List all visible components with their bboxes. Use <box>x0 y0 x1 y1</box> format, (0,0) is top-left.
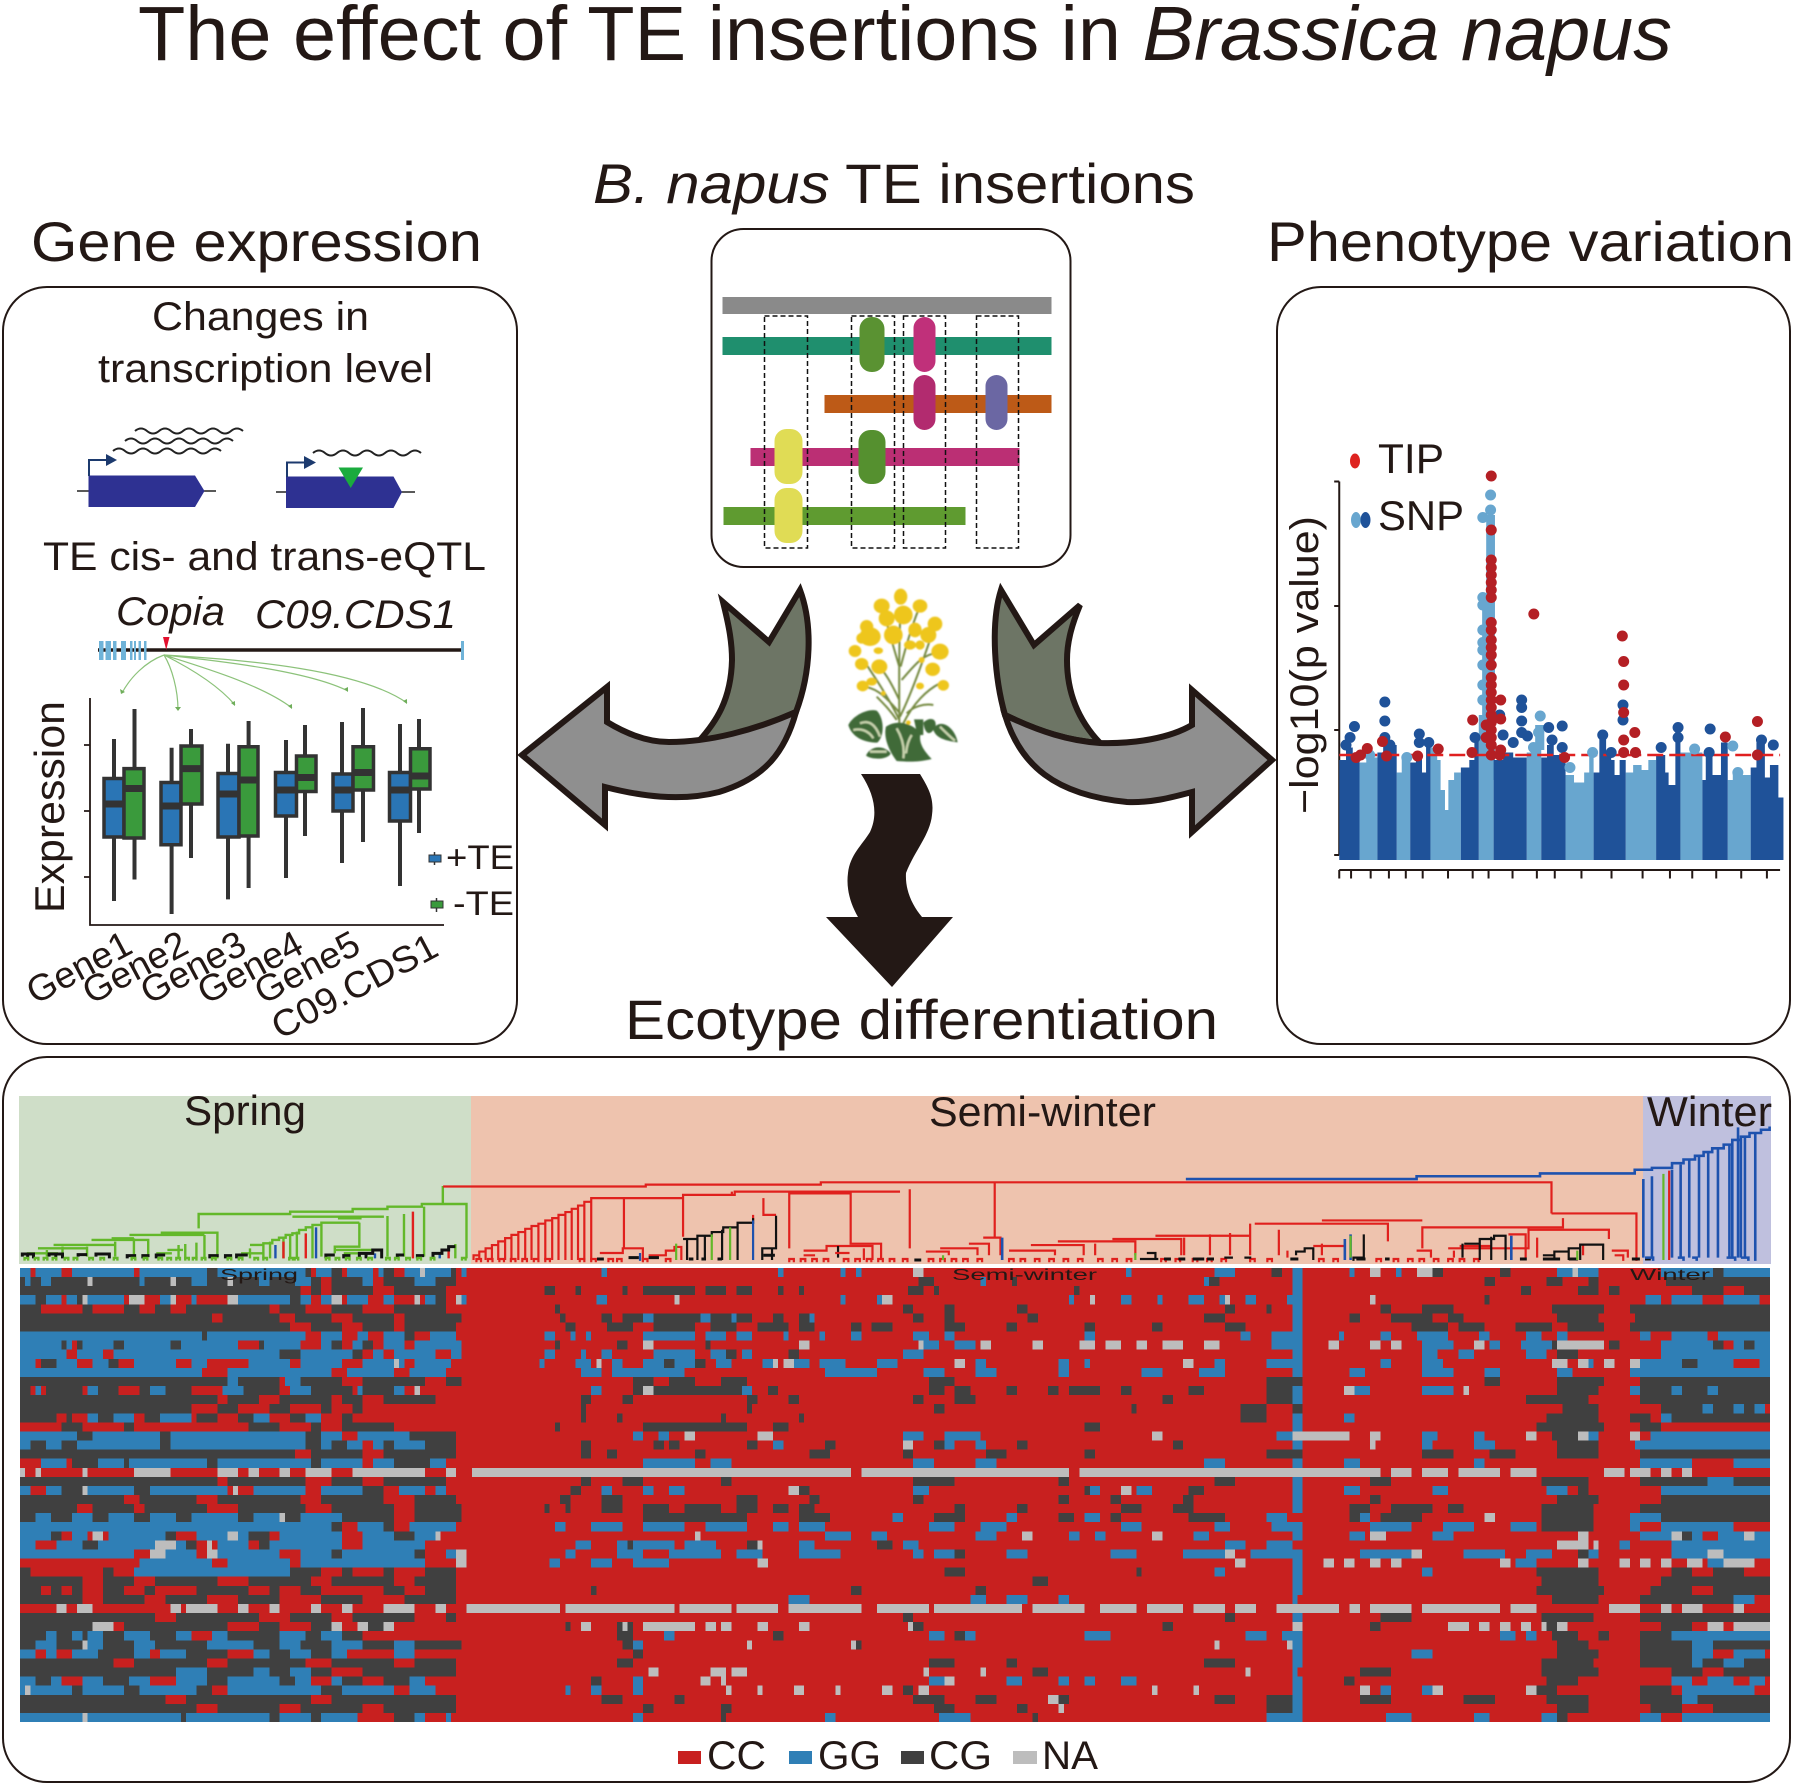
icon: gene with TE insertion, one transcript <box>276 450 421 508</box>
icon: rapeseed plant <box>848 589 958 762</box>
ecotype band: spring <box>19 1096 471 1264</box>
phylogenetic tree <box>22 1126 1770 1262</box>
leaves <box>848 710 958 762</box>
boxplot axes <box>84 698 444 925</box>
legend: +TE: +TE <box>446 839 514 877</box>
label: Spring: Spring <box>184 1087 306 1134</box>
tree: spring clade <box>22 1186 466 1261</box>
axes <box>1334 482 1780 878</box>
ecotype band: winter <box>1643 1096 1771 1264</box>
legend item: GG <box>789 1734 881 1778</box>
gene model with TE marker and links <box>98 637 464 711</box>
legend: TIP: TIP <box>1378 435 1444 482</box>
threshold line <box>1339 754 1780 756</box>
x-axis gene labels: C09.CDS1 <box>265 925 444 1047</box>
ecotype band: semi-winter <box>471 1096 1643 1264</box>
icon: gene without TE, three transcripts <box>77 428 243 507</box>
heading: Gene expression: Gene expression <box>31 210 482 273</box>
stems <box>862 610 940 727</box>
panel: gene expression <box>3 287 517 1047</box>
text: TE cis- and trans-eQTL: TE cis- and trans-eQTL <box>43 535 486 579</box>
light SNP points <box>1370 495 1738 772</box>
text: Copia: Copia <box>116 590 225 634</box>
panel: phenotype variation <box>1277 287 1790 1044</box>
legend item: CG: CG <box>929 1734 992 1778</box>
text: changes in transcription level: Changes in <box>152 295 369 339</box>
heatmap: CG cells <box>20 1273 1770 1717</box>
legend: genotype <box>678 1734 1098 1778</box>
legend: -TE: -TE <box>453 885 514 923</box>
legend item: CG <box>901 1734 992 1778</box>
legend: SNP: SNP <box>1378 492 1464 539</box>
text: changes in transcription level: transcription level <box>98 347 433 391</box>
label: Winter: Winter <box>1647 1088 1772 1135</box>
x-axis gene labels <box>20 923 444 1047</box>
panel: B. napus TE insertions <box>712 229 1070 567</box>
TIP points <box>1356 476 1757 758</box>
dashed TE loci boxes <box>764 316 1018 548</box>
dark chromosomes <box>1339 725 1783 860</box>
light chromosomes <box>1360 515 1751 860</box>
label: Semi-winter: Semi-winter <box>929 1088 1156 1135</box>
TE insertion pills <box>774 317 1008 543</box>
heading: Phenotype variation: Phenotype variation <box>1267 210 1794 273</box>
heatmap sub-labels: Winter <box>1630 1267 1711 1284</box>
y-axis label: −log10(p value) <box>1283 516 1327 814</box>
legend: TIP <box>1350 435 1444 482</box>
haplotype tracks <box>722 297 1052 525</box>
heading: Ecotype differentiation: Ecotype differentiation <box>625 988 1218 1051</box>
heatmap: NA cells <box>20 1273 1770 1717</box>
text: C09.CDS1: C09.CDS1 <box>255 593 456 637</box>
arrow: to phenotype variation <box>995 590 1272 832</box>
flowers <box>849 589 949 725</box>
legend: -TE <box>431 885 514 923</box>
legend item: NA <box>1013 1734 1098 1778</box>
heatmap <box>20 1267 1770 1722</box>
legend item: NA: NA <box>1042 1734 1098 1778</box>
text: Expression axis label: Expression <box>26 701 73 913</box>
heatmap: GG cells <box>20 1273 1770 1717</box>
tree: semi-winter right and winter <box>900 1126 1770 1262</box>
x-axis gene labels: Gene5 <box>248 923 367 1012</box>
text: changes in transcription level <box>98 295 433 391</box>
arrow: to ecotype differentiation <box>826 774 953 987</box>
heatmap sub-labels: Semi-winter <box>952 1267 1098 1284</box>
legend item: GG: GG <box>818 1734 881 1778</box>
tree: semi-winter left <box>443 1182 900 1262</box>
heatmap sub-labels: Spring <box>220 1267 298 1284</box>
panel: ecotype differentiation <box>3 1057 1790 1782</box>
dark SNP points <box>1346 700 1773 752</box>
x-axis gene labels: Gene1 <box>20 923 139 1012</box>
legend item: CC <box>678 1734 766 1778</box>
x-axis gene labels: Gene4 <box>191 923 310 1012</box>
heading: B. napus TE insertions: B. napus TE insertions <box>593 152 1195 215</box>
arrow: to gene expression <box>522 590 809 825</box>
x-axis gene labels: Gene3 <box>134 923 253 1012</box>
manhattan plot <box>1334 476 1783 878</box>
boxplot: expression by gene <box>104 708 430 914</box>
heatmap sub-labels <box>220 1267 1711 1284</box>
x-axis gene labels: Gene2 <box>76 923 195 1012</box>
legend item: CC: CC <box>707 1734 766 1778</box>
